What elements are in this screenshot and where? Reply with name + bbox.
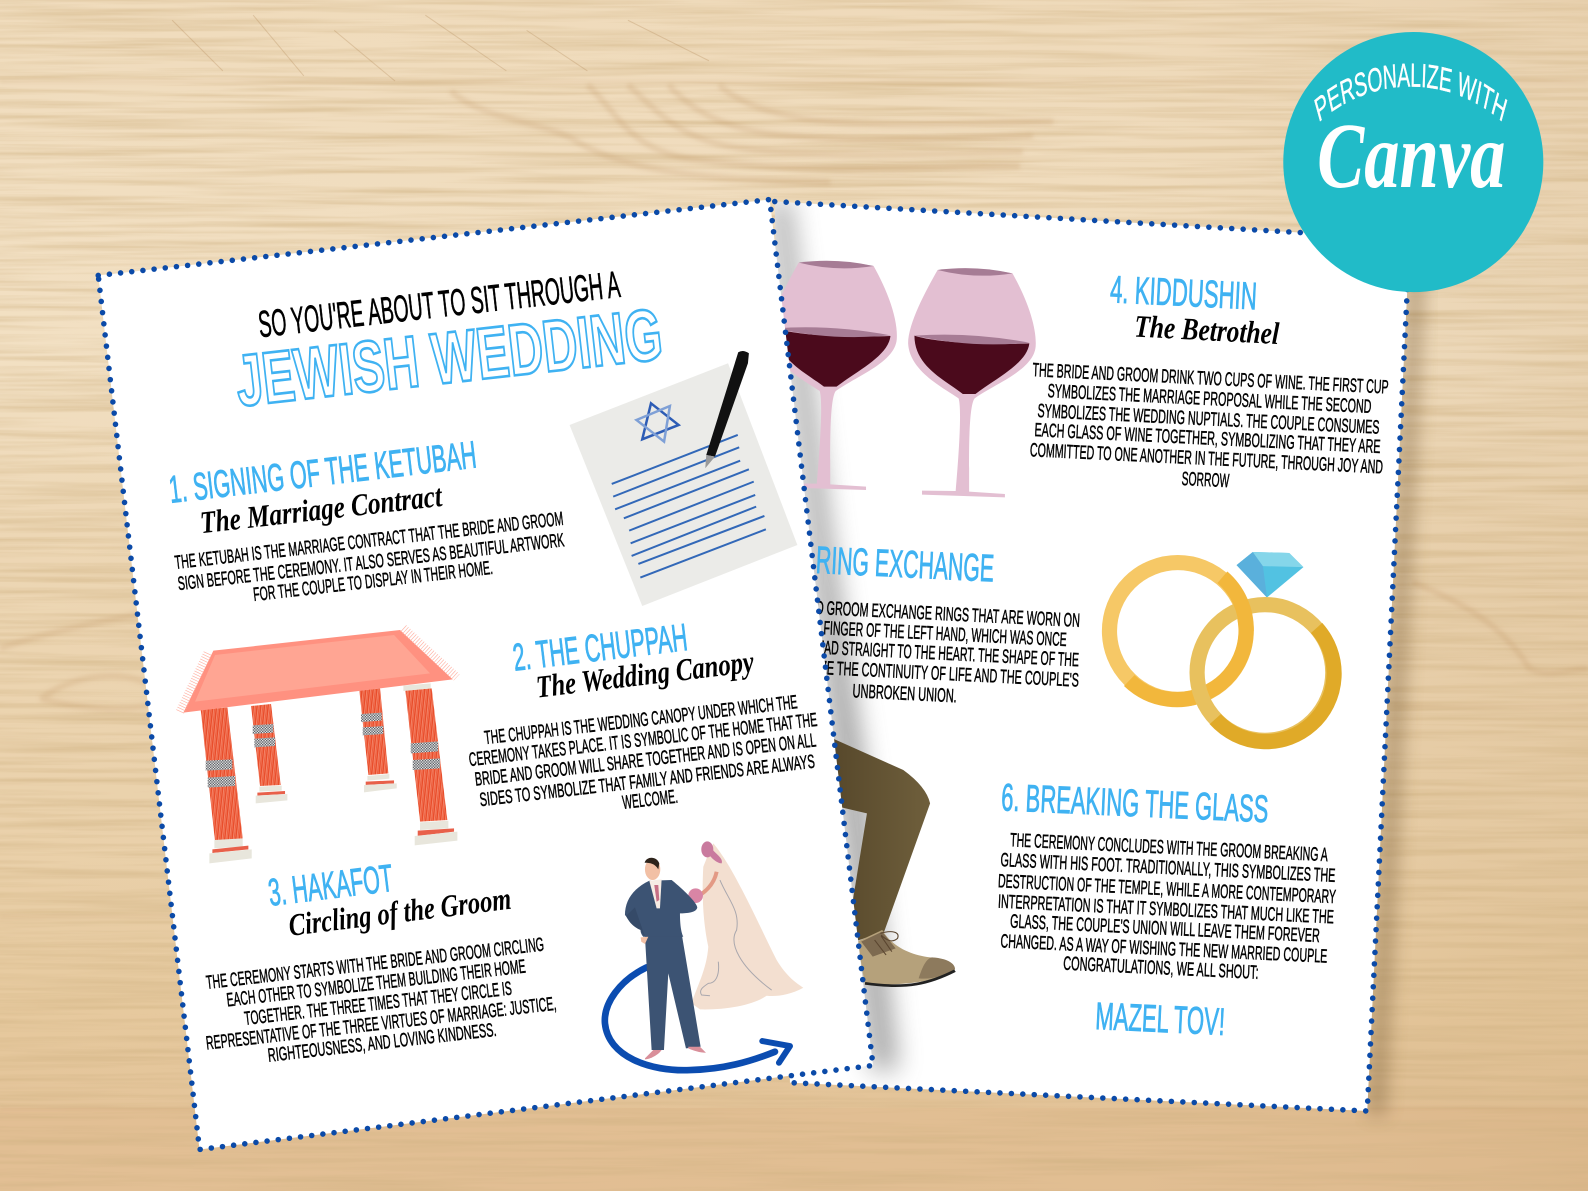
text: chuppah body: BRIDE AND GROOM WILL SHARE TOGETHER AND IS OPEN ON ALL bbox=[474, 730, 817, 791]
text: ring exchange body bbox=[709, 594, 1080, 707]
badge text: canva: Canva bbox=[1317, 105, 1505, 208]
dotted border right page bbox=[775, 202, 1410, 1111]
text: ring exchange body: THE BRIDE AND GROOM EXCHANGE RINGS THAT ARE WORN ON bbox=[740, 594, 1080, 632]
back right column bbox=[359, 688, 397, 792]
text: ring exchange body: THE RINGS SYMBOLIZE THE CONTINUITY OF LIFE AND THE COUPLE'S bbox=[709, 653, 1079, 692]
panel: left page bbox=[98, 200, 873, 1149]
text: breaking the glass body: INTERPRETATION IS THAT IT SYMBOLIZES THAT MUCH LIKE THE bbox=[998, 892, 1334, 928]
canopy roof bbox=[180, 628, 457, 713]
left wine glass bbox=[769, 261, 897, 490]
text: hakafot body: REPRESENTATIVE OF THE THREE VIRTUES OF MARRIAGE: JUSTICE, bbox=[205, 994, 557, 1055]
text: hakafot body: THE CEREMONY STARTS WITH THE BRIDE AND GROOM CIRCLING bbox=[205, 935, 545, 994]
text: ketubah body: FOR THE COUPLE TO DISPLAY IN THEIR HOME. bbox=[252, 558, 494, 606]
heading: kiddushin: 4. KIDDUSHIN bbox=[1109, 268, 1258, 318]
text: hakafot body: TOGETHER. THE THREE TIMES THAT THEY CIRCLE IS bbox=[243, 979, 513, 1030]
front right column bbox=[403, 683, 457, 845]
star of david bbox=[636, 403, 679, 442]
right wine glass bbox=[908, 268, 1036, 497]
text: breaking the glass body: GLASS, THE COUPLE'S UNION WILL LEAVE THEM FOREVER bbox=[1010, 911, 1320, 947]
heading: breaking the glass: 6. BREAKING THE GLASS bbox=[1000, 776, 1269, 831]
text: ring exchange body: BELIEVED TO LEAD STRAIGHT TO THE HEART. THE SHAPE OF THE bbox=[739, 634, 1079, 671]
text: ketubah body bbox=[174, 509, 566, 606]
icon: gold rings with diamond bbox=[1109, 552, 1334, 742]
title: jewish wedding outline: JEWISH WEDDING bbox=[232, 294, 666, 422]
text: ketubah body: SIGN BEFORE THE CEREMONY. IT ALSO SERVES AS BEAUTIFUL ARTWORK bbox=[177, 530, 566, 595]
panel: right page bbox=[709, 200, 1410, 1111]
text lines on document bbox=[612, 435, 766, 578]
groom bbox=[625, 858, 706, 1059]
right page shadow bbox=[1367, 239, 1426, 1116]
badge text: personalize with: PERSONALIZE WITH bbox=[1314, 63, 1508, 122]
badge: personalize with canva bbox=[1283, 32, 1544, 292]
text: chuppah body bbox=[468, 692, 818, 814]
subtitle: the betrothel: The Betrothel bbox=[1134, 309, 1280, 351]
subtitle: the wedding canopy: The Wedding Canopy bbox=[534, 644, 756, 705]
text: ring exchange body: THE FOURTH FINGER OF THE LEFT HAND, WHICH WAS ONCE bbox=[753, 615, 1067, 651]
text: breaking the glass body: GLASS WITH HIS FOOT. TRADITIONALLY, THIS SYMBOLIZES THE bbox=[1000, 850, 1336, 887]
text: chuppah body: SIDES TO SYMBOLIZE THAT FAMILY AND FRIENDS ARE ALWAYS bbox=[479, 752, 816, 811]
text: chuppah body: THE CHUPPAH IS THE WEDDING CANOPY UNDER WHICH THE bbox=[483, 692, 799, 749]
diamond bbox=[1237, 552, 1303, 598]
text: kiddushin body bbox=[1029, 360, 1389, 492]
dotted border left page bbox=[98, 200, 873, 1149]
title: first line: SO YOU'RE ABOUT TO SIT THROUGH A bbox=[256, 263, 622, 345]
back left column bbox=[251, 704, 287, 803]
icon: chuppah canopy bbox=[180, 628, 457, 863]
text: breaking the glass body: CONGRATULATIONS, WE ALL SHOUT: bbox=[1063, 954, 1259, 984]
fold shadow bbox=[772, 200, 896, 1069]
text: ring exchange body: UNBROKEN UNION. bbox=[852, 681, 957, 707]
text: hakafot body: RIGHTEOUSNESS, AND LOVING KINDNESS. bbox=[267, 1020, 498, 1067]
subtitle: the marriage contract: The Marriage Contract bbox=[198, 478, 445, 540]
text: hakafot body bbox=[205, 935, 557, 1067]
subtitle: circling of the groom: Circling of the Groom bbox=[287, 881, 513, 943]
icon: groom's leg and shoe bbox=[833, 738, 955, 986]
text: ketubah body: THE KETUBAH IS THE MARRIAGE CONTRACT THAT THE BRIDE AND GROOM bbox=[174, 509, 564, 574]
heading: signing of the ketubah: 1. SIGNING OF THE KETUBAH bbox=[167, 434, 479, 512]
heading: hakafot: 3. HAKAFOT bbox=[266, 857, 395, 915]
text: chuppah body: WELCOME. bbox=[621, 787, 679, 814]
text: breaking the glass body: THE CEREMONY CONCLUDES WITH THE GROOM BREAKING A bbox=[1010, 830, 1328, 866]
text: breaking the glass body: CHANGED. AS A WAY OF WISHING THE NEW MARRIED COUPLE bbox=[1000, 931, 1328, 968]
bride bbox=[688, 841, 803, 1009]
icon: bride and groom with circling arrow bbox=[605, 841, 803, 1070]
icon: ketubah document with star and pen bbox=[570, 351, 797, 606]
front left column bbox=[201, 707, 252, 863]
circling arrow bbox=[605, 967, 790, 1070]
text: kiddushin body: SORROW bbox=[1181, 469, 1230, 492]
heading: ring exchange: RING EXCHANGE bbox=[815, 539, 995, 591]
text: breaking the glass body bbox=[998, 830, 1336, 984]
heading: the chuppah: 2. THE CHUPPAH bbox=[511, 616, 690, 680]
text: chuppah body: CEREMONY TAKES PLACE. IT IS SYMBOLIC OF THE HOME THAT THE bbox=[468, 710, 818, 771]
icon: wine glasses bbox=[769, 261, 1036, 497]
callout: mazel tov: MAZEL TOV! bbox=[1094, 995, 1226, 1044]
pen bbox=[705, 351, 749, 468]
text: hakafot body: EACH OTHER TO SYMBOLIZE THEM BUILDING THEIR HOME bbox=[226, 957, 527, 1011]
